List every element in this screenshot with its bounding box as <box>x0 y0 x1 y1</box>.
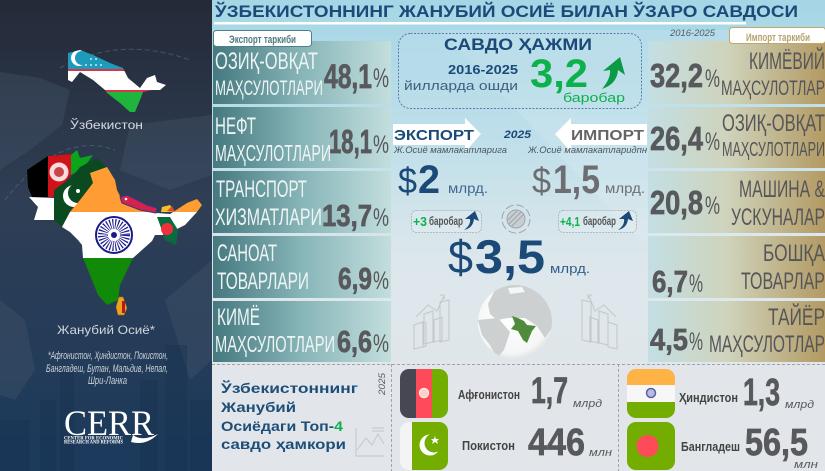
import heading with arrow: ИМПОРТ <box>571 127 644 144</box>
import row 2: 26,4 <box>650 120 704 157</box>
panel: export structure <box>213 30 391 362</box>
icon: globe with South Asia <box>478 285 552 358</box>
callout: trade volume: САВДО ҲАЖМИ <box>444 36 592 54</box>
total value: $ <box>448 231 473 283</box>
import row 3: 20,8 <box>650 184 703 221</box>
export row 5: МАҲСУЛОТЛАРИ <box>215 331 335 357</box>
import row 4 <box>652 240 825 299</box>
partners heading: Жанубий <box>220 399 296 415</box>
badge: +3 times: баробар <box>429 214 463 228</box>
export row 2: % <box>373 131 389 159</box>
panel: top-4 partners <box>212 364 825 471</box>
years label: 2016-2025 <box>669 28 716 38</box>
partners heading: Осиёдаги Топ- 4 <box>221 418 343 434</box>
export row 5: 6,6 <box>337 324 372 359</box>
title: ЎЗБЕКИСТОННИНГ ЖАНУБИЙ ОСИЁ БИЛАН ЎЗАРО САВДОСИ <box>214 1 798 21</box>
import row 1 <box>650 47 825 100</box>
total value <box>448 230 590 283</box>
import value <box>532 158 645 202</box>
panel: import structure <box>648 28 825 362</box>
footnote: South Asia countries: *Афғонистон, Ҳиндистон, Покистон, <box>48 350 168 362</box>
export row 1: 48,1 <box>324 58 372 96</box>
export row 2: НЕФТ <box>215 113 256 140</box>
export tag: Экспорт таркиби <box>229 34 296 46</box>
panel: left map panel <box>0 0 212 471</box>
total value: 3,5 <box>475 230 545 283</box>
icon: growth arrow <box>602 57 625 89</box>
export row 5: КИМЁ <box>217 304 260 331</box>
India: млрд <box>785 399 814 411</box>
logo: CERR: CERR <box>64 403 154 443</box>
rotated year: 2025 <box>377 372 387 396</box>
India: Ҳиндистон <box>679 390 738 405</box>
export row 2: МАҲСУЛОТЛАРИ <box>215 140 331 166</box>
import row 5: 4,5 <box>650 322 688 357</box>
export value: млрд. <box>448 180 488 196</box>
footnote: South Asia countries <box>46 350 168 387</box>
badge: +4.1 times: +4,1 <box>560 214 580 229</box>
import row 2: % <box>705 128 720 156</box>
export row 4: 6,9 <box>338 261 372 296</box>
export value <box>398 158 488 202</box>
callout: trade volume: 2016-2025 <box>448 62 518 77</box>
export row 1 <box>215 48 389 100</box>
callout: trade volume <box>398 34 642 108</box>
Bangladesh: 56,5 <box>745 422 808 464</box>
Afghanistan <box>400 369 602 418</box>
export heading with arrow: ЭКСПОРТ <box>394 127 474 144</box>
partners heading: савдо ҳамкори <box>221 436 346 452</box>
India: 1,3 <box>743 372 780 414</box>
export row 4: % <box>373 267 389 295</box>
total value: млрд. <box>550 261 590 276</box>
icon: bar chart right <box>582 295 617 349</box>
footnote: South Asia countries: Бангладеш, Бутан, Мальдив, Непал, <box>46 363 168 375</box>
import row 1: % <box>705 65 720 93</box>
Bangladesh <box>627 422 818 471</box>
export row 3: ХИЗМАТЛАРИ <box>215 204 322 231</box>
export heading with arrow <box>393 118 507 155</box>
map: South Asia flags <box>27 150 205 315</box>
Bangladesh: млн <box>794 459 818 471</box>
footnote: South Asia countries: Шри-Ланка <box>88 375 127 387</box>
export row 1: МАҲСУЛОТЛАРИ <box>215 77 323 100</box>
export tag <box>214 30 312 46</box>
badge: +4.1 times: баробар <box>583 214 616 228</box>
export row 1: ОЗИҚ-ОВҚАТ <box>215 48 318 75</box>
export row 3 <box>215 176 389 233</box>
export row 5 <box>215 304 389 359</box>
import row 4: 6,7 <box>652 264 688 299</box>
Pakistan: Покистон <box>462 438 515 453</box>
India <box>627 369 814 418</box>
year 2025: 2025 <box>503 129 532 141</box>
export row 3: ТРАНСПОРТ <box>216 176 307 203</box>
Afghanistan: Афғонистон <box>458 387 520 402</box>
import row 1: 32,2 <box>650 57 703 94</box>
import value: $ <box>532 160 551 201</box>
import value: млрд. <box>605 180 645 196</box>
callout: trade volume: 3,2 <box>530 52 588 96</box>
export value: $ <box>398 160 417 201</box>
Pakistan: 446 <box>528 422 585 464</box>
icon: small chart <box>356 428 384 456</box>
callout: trade volume: баробар <box>563 90 625 105</box>
partners heading: Ўзбекистоннинг <box>220 379 358 396</box>
import row 5 <box>650 303 825 358</box>
import row 3 <box>650 176 825 231</box>
Afghanistan: 1,7 <box>531 370 568 411</box>
badge: +4.1 times <box>558 210 636 232</box>
Afghanistan: млрд <box>573 398 602 410</box>
badge: +3 times <box>412 210 482 232</box>
label: Uzbekistan: Ўзбекистон <box>70 117 143 132</box>
export row 4 <box>217 240 389 296</box>
import value: 1,5 <box>553 158 600 202</box>
map: Uzbekistan flag <box>68 50 166 112</box>
export row 2: 18,1 <box>329 123 372 160</box>
logo: CERR: CENTER FOR ECONOMIC <box>64 436 124 442</box>
export row 4: ТОВАРЛАРИ <box>217 268 309 295</box>
export row 5: % <box>373 330 389 358</box>
export row 2 <box>215 113 389 166</box>
export row 3: % <box>373 204 389 232</box>
import tag <box>730 28 825 44</box>
export row 3: 13,7 <box>322 198 372 233</box>
import row 4: % <box>689 270 703 298</box>
callout: trade volume: йилларда ошди <box>404 78 518 93</box>
import heading with arrow: Ж.Осиё мамлакатларидпн <box>527 145 647 155</box>
import row 2 <box>650 110 825 161</box>
Pakistan <box>400 422 612 470</box>
icon: bar chart left <box>414 295 449 349</box>
export heading with arrow: Ж.Осиё мамлакатларига <box>393 145 507 155</box>
import row 3: % <box>705 192 720 220</box>
page background <box>212 0 825 471</box>
logo: CERR: RESEARCH AND REFORMS <box>64 440 123 446</box>
export row 1: % <box>373 63 389 93</box>
label: South Asia: Жанубий Осиё* <box>57 323 155 337</box>
import row 5: % <box>689 328 703 356</box>
Pakistan: млн <box>589 447 612 459</box>
partners heading <box>220 379 358 452</box>
badge: +3 times: +3 <box>413 214 427 229</box>
Bangladesh: Бангладеш <box>681 439 740 454</box>
export row 4: САНОАТ <box>217 240 277 267</box>
export value: 2 <box>418 158 440 202</box>
import heading with arrow <box>527 118 647 155</box>
icon: exchange circle <box>502 205 530 233</box>
